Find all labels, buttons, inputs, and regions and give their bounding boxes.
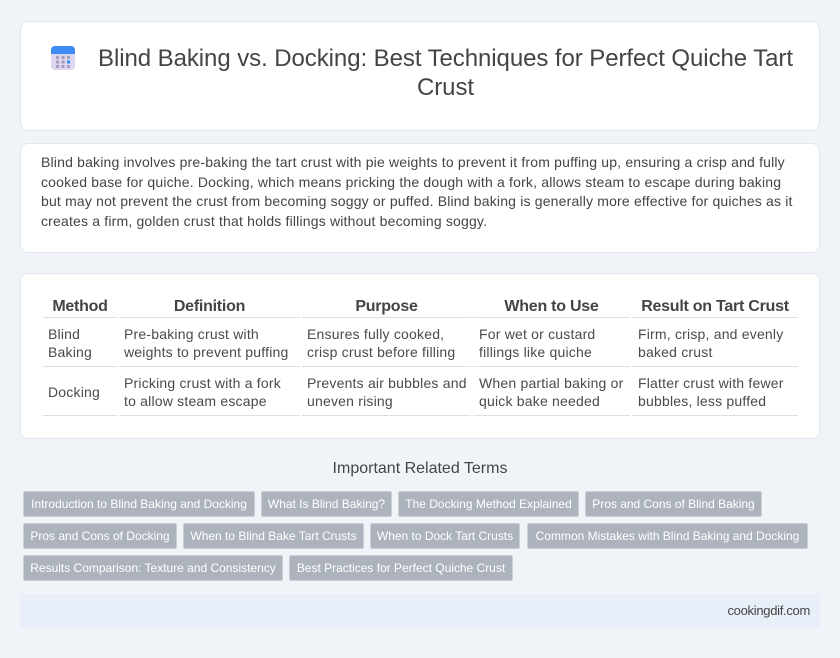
comparison table: Docking <box>48 384 100 400</box>
comparison table: Ensures fully cooked, <box>307 326 444 342</box>
description card <box>20 143 820 253</box>
related term tags: Common Mistakes with Blind Baking and Docking <box>536 529 799 543</box>
description text: cooked base for quiche. Docking, which means pricking the dough with a fork, allows steam to escape during baking <box>41 174 781 190</box>
related term tags: Best Practices for Perfect Quiche Crust <box>297 561 505 575</box>
comparison table <box>43 298 798 416</box>
description text: Blind baking involves pre-baking the tart crust with pie weights to prevent it from puffing up, ensuring a crisp and fully <box>41 154 785 170</box>
comparison table: Purpose <box>355 298 418 315</box>
description text: but may not prevent the crust from becoming soggy or puffed. Blind baking is generally more effective for quiches as it <box>41 193 793 209</box>
comparison table: bubbles, less puffed <box>638 393 766 409</box>
related terms heading: Important Related Terms <box>333 460 507 477</box>
comparison table: Result on Tart Crust <box>641 298 789 315</box>
related term tags: What Is Blind Baking? <box>268 497 385 511</box>
related term tags: Pros and Cons of Docking <box>30 529 170 543</box>
comparison table: crisp crust before filling <box>307 344 455 360</box>
comparison table: Method <box>52 298 108 315</box>
comparison table: weights to prevent puffing <box>124 344 288 360</box>
description text: creates a firm, golden crust that holds fillings without becoming soggy. <box>41 212 487 228</box>
comparison table: quick bake needed <box>479 393 600 409</box>
related term tags: Introduction to Blind Baking and Docking <box>31 497 247 511</box>
comparison table: baked crust <box>638 344 713 360</box>
comparison table: Pricking crust with a fork <box>124 375 281 391</box>
footer source: cookingdif.com <box>727 603 810 618</box>
comparison table: Flatter crust with fewer <box>638 375 784 391</box>
related term tags: Pros and Cons of Blind Baking <box>592 497 755 511</box>
comparison table: Blind <box>48 326 80 342</box>
comparison table: Pre-baking crust with <box>124 326 259 342</box>
comparison table: When to Use <box>504 298 599 315</box>
footer bar <box>20 594 820 628</box>
comparison table: Firm, crisp, and evenly <box>638 326 783 342</box>
comparison table: to allow steam escape <box>124 393 267 409</box>
comparison table: When partial baking or <box>479 375 623 391</box>
comparison table: Baking <box>48 344 92 360</box>
table card <box>20 273 820 439</box>
title: Crust <box>417 74 474 101</box>
related term tags: When to Blind Bake Tart Crusts <box>190 529 357 543</box>
comparison table: fillings like quiche <box>479 344 592 360</box>
comparison table: Prevents air bubbles and <box>307 375 467 391</box>
description text <box>41 154 793 229</box>
header card <box>20 21 820 131</box>
related term tags: When to Dock Tart Crusts <box>377 529 513 543</box>
comparison table: For wet or custard <box>479 326 595 342</box>
related term tags <box>23 491 808 581</box>
comparison table: Definition <box>174 298 245 315</box>
comparison table: uneven rising <box>307 393 393 409</box>
related term tags: The Docking Method Explained <box>405 497 572 511</box>
title <box>98 45 793 101</box>
related term tags: Results Comparison: Texture and Consistency <box>30 561 276 575</box>
title: Blind Baking vs. Docking: Best Techniques for Perfect Quiche Tart <box>98 45 793 72</box>
icon: calendar <box>51 46 75 70</box>
